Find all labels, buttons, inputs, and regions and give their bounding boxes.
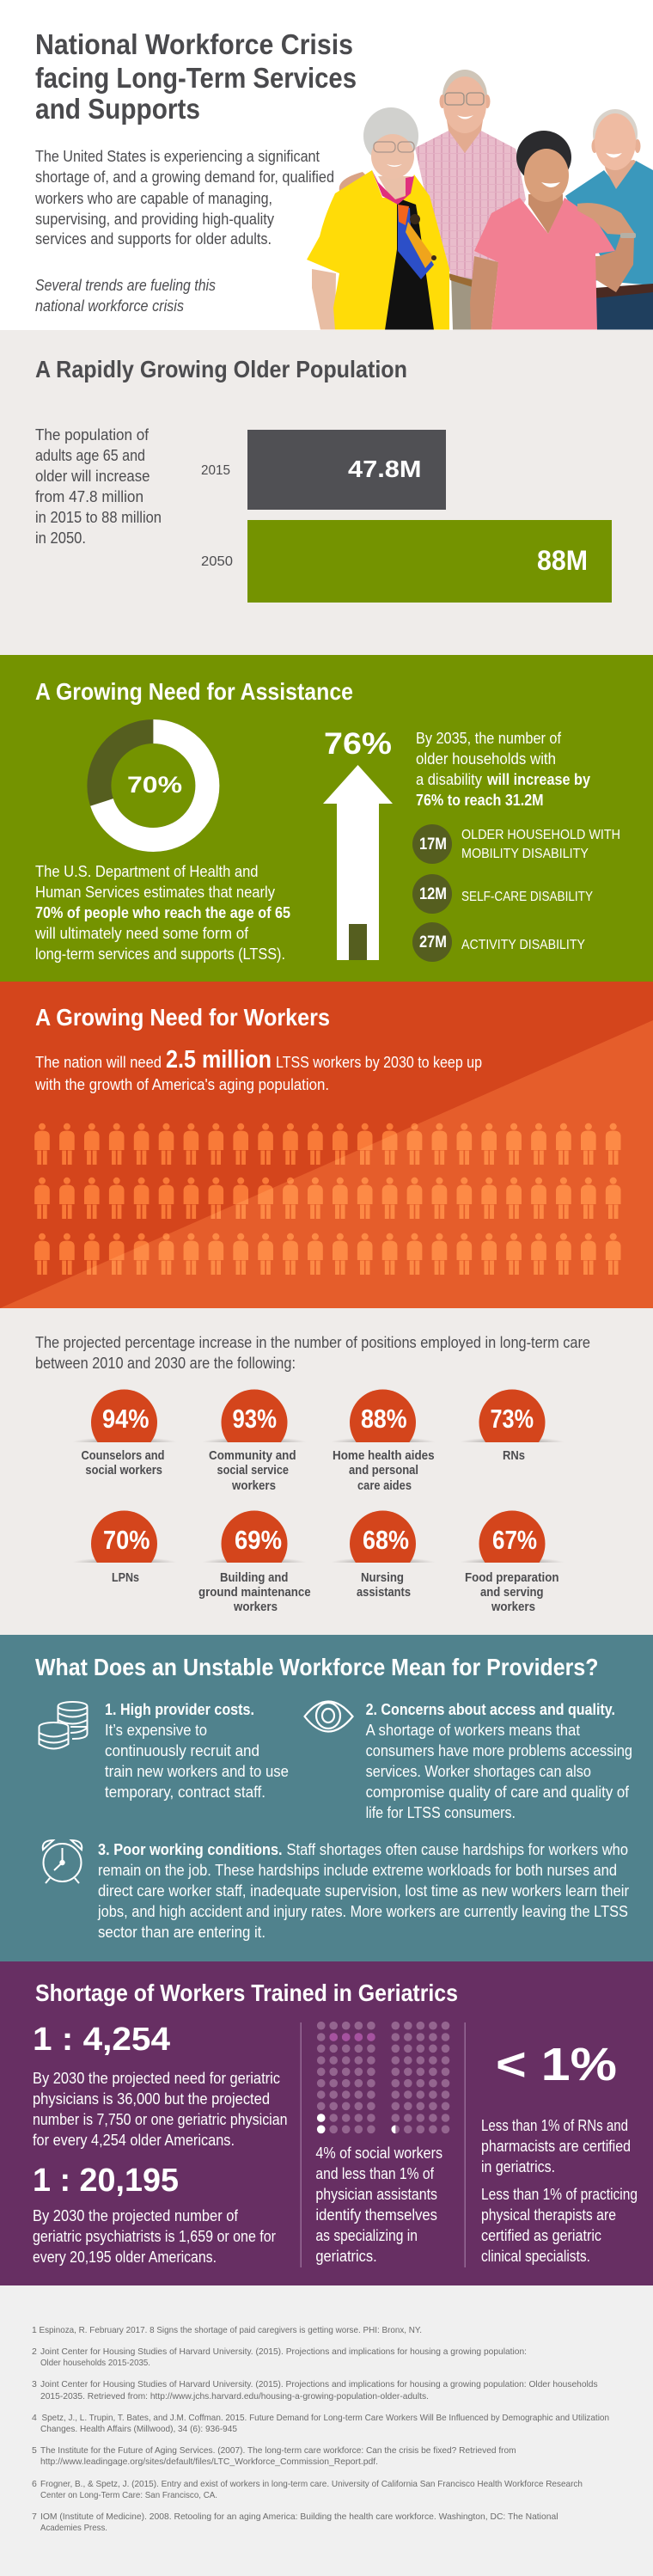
woman in pink shirt xyxy=(470,131,636,330)
bar 2015: 2015 xyxy=(201,463,230,478)
stat: 27M xyxy=(412,922,585,962)
italic lead-in: national workforce crisis xyxy=(35,297,184,315)
stat: physicians ratio: physicians is 36,000 but the projected xyxy=(33,2090,270,2108)
stat: 17M: MOBILITY DISABILITY xyxy=(461,847,589,861)
text: RNs and therapists: clinical specialists. xyxy=(481,2248,590,2265)
text: concerns about access and quality: compromise quality of care and quality of xyxy=(366,1784,630,1801)
reference 7 xyxy=(32,2512,558,2533)
stat: psychiatrists ratio: every 20,195 older Americans. xyxy=(33,2249,217,2266)
stat: 68% nursing: Nursing xyxy=(361,1570,404,1585)
stat: 73% RNs: 73% xyxy=(490,1404,534,1434)
reference 4: 4 xyxy=(32,2413,37,2423)
intro text: The projected percentage increase in the number of positions employed in long-term care xyxy=(35,1334,590,1351)
population text: in 2050. xyxy=(35,529,86,547)
stat: 93% community: Community and xyxy=(209,1448,296,1463)
stat: psychiatrists ratio: By 2030 the projected number of xyxy=(33,2207,239,2224)
text: high provider costs xyxy=(105,1701,289,1801)
text: poor working conditions: Staff shortages often cause hardships for workers who xyxy=(287,1841,628,1858)
stat: 93% community: workers xyxy=(231,1478,276,1493)
dot matrix chart xyxy=(317,2022,449,2133)
text: poor working conditions: sector than are entering it. xyxy=(98,1924,265,1941)
workers text: The nation will need xyxy=(35,1054,162,1071)
stat: 69% building xyxy=(198,1511,311,1614)
title: and Supports xyxy=(35,93,200,125)
reference 3 xyxy=(32,2379,598,2402)
text: high provider costs: train new workers and to use xyxy=(105,1763,289,1780)
bar 2015 xyxy=(201,430,446,510)
bar 2050 xyxy=(201,520,612,603)
population text: The population of xyxy=(35,426,150,444)
reference 2: 2 xyxy=(32,2347,37,2357)
text: RNs and therapists: pharmacists are certified xyxy=(481,2138,631,2155)
text: social workers: as specializing in xyxy=(315,2227,418,2244)
heading: A Rapidly Growing Older Population xyxy=(35,356,407,382)
assistance text: Human Services estimates that nearly xyxy=(35,884,275,901)
disability text: will increase by xyxy=(486,771,590,788)
reference 5: http://www.leadingage.org/sites/default/files/LTC_Workforce_Commission_Report.pdf. xyxy=(40,2457,378,2467)
stat: 17M: OLDER HOUSEHOLD WITH xyxy=(461,828,620,842)
reference 7: 7 xyxy=(32,2512,37,2522)
intro text: between 2010 and 2030 are the following: xyxy=(35,1355,296,1372)
stat: 17M xyxy=(412,824,620,864)
reference 5: 5 xyxy=(32,2445,37,2456)
text: high provider costs: 1. High provider costs. xyxy=(105,1701,254,1718)
text: concerns about access and quality: A shortage of workers means that xyxy=(366,1722,580,1739)
title xyxy=(35,28,357,125)
reference 6: 6 xyxy=(32,2479,37,2489)
stat: physicians ratio: 1 : 4,254 xyxy=(33,2022,170,2058)
population text: from 47.8 million xyxy=(35,488,143,505)
text: concerns about access and quality: life for LTSS consumers. xyxy=(366,1804,516,1821)
text: concerns about access and quality: consumers have more problems accessing xyxy=(366,1742,632,1759)
disability text xyxy=(416,730,590,809)
stat: 88% home health: 88% xyxy=(361,1404,407,1434)
disability text: a disability xyxy=(416,771,482,788)
reference 4 xyxy=(32,2413,609,2434)
heading: Shortage of Workers Trained in Geriatrics xyxy=(35,1979,458,2006)
text: RNs and therapists: in geriatrics. xyxy=(481,2158,555,2175)
panel: unstable workforce xyxy=(0,1635,653,1961)
assistance text: 70% of people who reach the age of 65 xyxy=(35,904,290,921)
population text: in 2015 to 88 million xyxy=(35,509,162,526)
text: poor working conditions: 3. Poor working conditions. xyxy=(98,1841,283,1858)
donut chart 70% xyxy=(99,731,207,840)
population text xyxy=(35,426,162,547)
stat: 69% building: Building and xyxy=(220,1570,288,1585)
stat: 73% RNs: RNs xyxy=(503,1448,525,1463)
text: social workers: and less than 1% of xyxy=(315,2165,435,2182)
stat: 12M xyxy=(412,874,593,914)
icon: coins xyxy=(40,1702,88,1748)
reference 5 xyxy=(32,2445,516,2467)
stat: 70% LPNs xyxy=(76,1511,173,1582)
stat: psychiatrists ratio xyxy=(33,2163,276,2266)
heading: A Growing Need for Workers xyxy=(35,1004,330,1031)
reference 5: The Institute for the Future of Aging Services. (2007). The long-term care workforce: Can the crisis be fixed? Retrieved from xyxy=(40,2445,516,2456)
stat: 88% home health xyxy=(331,1389,436,1493)
assistance text xyxy=(34,863,290,963)
woman in yellow jacket xyxy=(307,107,449,330)
title: facing Long-Term Services xyxy=(35,62,357,94)
stat: psychiatrists ratio: 1 : 20,195 xyxy=(33,2163,179,2199)
photo: four older adults xyxy=(307,70,653,330)
stat: 69% building: 69% xyxy=(235,1525,282,1555)
text: high provider costs: continuously recruit and xyxy=(105,1742,259,1759)
stat: less than 1%: < 1% xyxy=(496,2039,617,2090)
panel: rapidly growing older population xyxy=(0,330,653,655)
stat: 88% home health: and personal xyxy=(349,1463,418,1478)
stat: 12M: SELF-CARE DISABILITY xyxy=(461,890,593,904)
stat: 67% food preparation: and serving xyxy=(480,1585,543,1600)
intro text xyxy=(35,1334,590,1372)
workers text: LTSS workers by 2030 to keep up xyxy=(276,1054,482,1071)
reference 2 xyxy=(32,2347,527,2368)
reference 1: 1 xyxy=(32,2325,37,2335)
reference 4: Changes. Health Affairs (Millwood), 34 (6): 936-945 xyxy=(40,2424,237,2434)
text: social workers xyxy=(315,2145,442,2265)
man in pink shirt xyxy=(339,70,526,330)
stat: 88% home health: care aides xyxy=(357,1478,412,1493)
stat: 67% food preparation: 67% xyxy=(492,1525,537,1555)
stat: 73% RNs xyxy=(464,1389,560,1459)
heading: A Growing Need for Assistance xyxy=(35,678,353,705)
text: RNs and therapists xyxy=(481,2117,638,2265)
reference 3: 3 xyxy=(32,2379,37,2389)
panel: shortage trained in geriatrics xyxy=(0,1961,653,2285)
text: social workers: physician assistants xyxy=(315,2186,437,2203)
text: social workers: geriatrics. xyxy=(315,2248,377,2265)
text: concerns about access and quality: 2. Concerns about access and quality. xyxy=(366,1701,615,1718)
stat: 67% food preparation: Food preparation xyxy=(465,1570,558,1585)
bar 2050: 88M xyxy=(537,545,588,576)
stat: 88% home health: Home health aides xyxy=(333,1448,435,1463)
stat: 70% LPNs: LPNs xyxy=(112,1570,139,1585)
stat: 93% community: 93% xyxy=(232,1404,277,1434)
icon: eye xyxy=(304,1702,352,1731)
disability text: 76% to reach 31.2M xyxy=(416,792,544,809)
reference 6: Center on Long-Term Care: San Francisco, CA. xyxy=(40,2490,217,2500)
workers text xyxy=(34,1046,482,1093)
stat: 68% nursing: assistants xyxy=(357,1585,411,1600)
intro paragraph: shortage of, and a growing demand for, qualified xyxy=(35,168,334,186)
stat: 94% counselors: Counselors and xyxy=(81,1448,165,1463)
reference 1: Espinoza, R. February 2017. 8 Signs the shortage of paid caregivers is getting worse. PHI: Bronx, NY. xyxy=(40,2325,422,2335)
reference 7: IOM (Institute of Medicine). 2008. Retooling for an aging America: Building the health care workforce. Washington, DC: The National xyxy=(40,2512,558,2522)
disability text: By 2035, the number of xyxy=(416,730,562,747)
panel: intro xyxy=(35,34,653,330)
intro paragraph: supervising, and providing high-quality xyxy=(35,211,274,228)
text: concerns about access and quality xyxy=(366,1701,632,1821)
stat: physicians ratio: By 2030 the projected need for geriatric xyxy=(33,2070,280,2087)
bar chart xyxy=(201,430,612,603)
assistance text: will ultimately need some form of xyxy=(34,925,249,942)
intro paragraph: workers who are capable of managing, xyxy=(34,190,272,207)
disability text: older households with xyxy=(416,750,556,768)
panel: growing need for assistance xyxy=(0,655,653,982)
text: social workers: identify themselves xyxy=(315,2206,437,2224)
stat: 27M: ACTIVITY DISABILITY xyxy=(461,938,585,952)
stat: 68% nursing: 68% xyxy=(363,1525,409,1555)
stat: 67% food preparation xyxy=(464,1511,560,1611)
stat: psychiatrists ratio: geriatric psychiatrists is 1,659 or one for xyxy=(33,2228,276,2245)
panel: references xyxy=(0,2285,653,2576)
stat: physicians ratio: number is 7,750 or one geriatric physician xyxy=(33,2111,287,2128)
text: concerns about access and quality: services. Worker shortages can also xyxy=(366,1763,591,1780)
assistance text: The U.S. Department of Health and xyxy=(35,863,258,880)
stat: 94% counselors: 94% xyxy=(102,1404,150,1434)
stat: 27M: 27M xyxy=(419,933,447,951)
title: National Workforce Crisis xyxy=(35,28,353,60)
stat: physicians ratio xyxy=(33,2022,287,2149)
reference 2: Older households 2015-2035. xyxy=(40,2358,150,2368)
text: social workers: 4% of social workers xyxy=(315,2145,442,2162)
stat: 93% community: social service xyxy=(217,1463,289,1478)
reference 2: Joint Center for Housing Studies of Harvard University. (2015). Projections and implications for housing a growing population: xyxy=(40,2347,527,2357)
bar 2015: 47.8M xyxy=(348,456,421,482)
stat: 69% building: workers xyxy=(233,1600,278,1614)
stat: 67% food preparation: workers xyxy=(491,1600,535,1614)
pictogram: rows of workers xyxy=(34,1123,620,1275)
assistance text: long-term services and supports (LTSS). xyxy=(35,945,285,963)
man in blue shirt xyxy=(565,109,653,330)
arrow with 76%: 76% xyxy=(324,727,392,761)
reference 3: Joint Center for Housing Studies of Harvard University. (2015). Projections and implications for housing a growing population: Older households xyxy=(40,2379,598,2389)
reference 4: Spetz, J., L. Trupin, T. Bates, and J.M. Coffman. 2015. Future Demand for Long-term Care Workers Will Be Influenced by Demographic and Utilization xyxy=(41,2413,609,2423)
icon: alarm clock xyxy=(43,1840,82,1883)
stat: physicians ratio: for every 4,254 older Americans. xyxy=(33,2132,235,2149)
text: poor working conditions: remain on the job. These hardships include extreme workloads for both nurses and xyxy=(98,1862,617,1879)
text: high provider costs: It’s expensive to xyxy=(105,1722,207,1739)
text: RNs and therapists: physical therapists are xyxy=(481,2206,616,2224)
stat: 69% building: ground maintenance xyxy=(198,1585,311,1600)
text: RNs and therapists: certified as geriatric xyxy=(481,2227,601,2244)
reference 3: 2015-2035. Retrieved from: http://www.jchs.harvard.edu/housing-a-growing-population-older-adults. xyxy=(40,2391,429,2402)
reference 6: Frogner, B., & Spetz, J. (2015). Entry and exist of workers in long-term care. University of California San Francisco Health Workforce Research xyxy=(40,2479,583,2489)
population text: adults age 65 and xyxy=(35,447,145,464)
stat: 17M: 17M xyxy=(419,835,447,854)
text: high provider costs: temporary, contract staff. xyxy=(105,1784,265,1801)
heading: What Does an Unstable Workforce Mean for Providers? xyxy=(35,1654,598,1680)
text: RNs and therapists: Less than 1% of RNs and xyxy=(481,2117,628,2134)
italic lead-in: Several trends are fueling this xyxy=(35,277,216,294)
panel: projected percentage increase xyxy=(0,1308,653,1635)
text: poor working conditions xyxy=(97,1841,629,1941)
population text: older will increase xyxy=(35,468,150,485)
reference 7: Academies Press. xyxy=(40,2523,107,2533)
panel: growing need for workers xyxy=(0,982,653,1308)
reference 6 xyxy=(32,2479,583,2500)
stat: 94% counselors xyxy=(76,1389,173,1474)
arrow with 76% xyxy=(323,727,393,960)
stat: 93% community xyxy=(206,1389,302,1490)
intro paragraph: services and supports for older adults. xyxy=(35,230,272,248)
stat: 94% counselors: social workers xyxy=(85,1463,162,1478)
bar 2050: 2050 xyxy=(201,554,233,569)
workers text: with the growth of America's aging population. xyxy=(34,1076,329,1093)
intro paragraph xyxy=(34,148,334,248)
workers text: 2.5 million xyxy=(166,1046,272,1074)
stat: 70% LPNs: 70% xyxy=(103,1525,150,1555)
intro paragraph: The United States is experiencing a significant xyxy=(35,148,320,165)
italic lead-in xyxy=(35,277,216,315)
stat: 12M: 12M xyxy=(419,885,447,903)
stat: 68% nursing xyxy=(335,1511,431,1596)
donut chart 70%: 70% xyxy=(127,772,182,798)
